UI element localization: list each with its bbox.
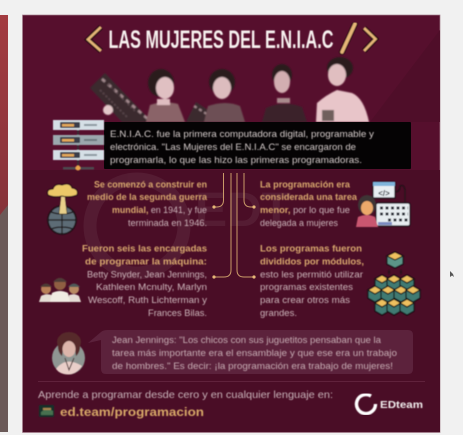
text: minor task: delegada a mujeres bbox=[260, 218, 338, 229]
text: modules: programas existentes bbox=[260, 282, 353, 293]
icon: left chevron bbox=[88, 27, 101, 51]
icon: three women bbox=[39, 278, 81, 302]
connector lines bbox=[212, 173, 256, 279]
watermark: EDteam logo: EDT bbox=[195, 184, 291, 237]
logo: EDteam bbox=[357, 395, 423, 414]
link: ed.team/programacion bbox=[60, 405, 204, 419]
text: construction: terminada en 1946. bbox=[128, 218, 207, 229]
text: six programmers: de programar la máquina: bbox=[85, 256, 207, 268]
call to action text: Aprende a programar desde cero y en cualquier lenguaje en: bbox=[38, 389, 333, 401]
logo: EDteam: EDteam bbox=[380, 399, 423, 411]
quote bubble: tarea más importante era el ensamblaje y que ese era un trabajo bbox=[112, 348, 397, 359]
text: six programmers: Fueron seis las encargadas bbox=[82, 244, 207, 254]
quote bubble: Jean Jennings: "Los chicos con sus juguetitos pensaban que la bbox=[112, 335, 382, 346]
intro text block bbox=[104, 122, 411, 169]
icon: modular cubes bbox=[368, 252, 420, 315]
text: modules: divididos por módulos, bbox=[260, 256, 364, 268]
photo: four programmers bbox=[90, 57, 369, 122]
icon: small landscape bbox=[39, 405, 54, 417]
heading text: LAS MUJERES DEL E.N.I.A.C bbox=[108, 26, 334, 54]
text: minor task: menor, por lo que fue bbox=[260, 205, 350, 216]
neighbouring panel: red edge bbox=[0, 15, 8, 432]
text: modules bbox=[260, 244, 364, 319]
circuit panel: middle bbox=[186, 102, 226, 122]
text: six programmers bbox=[82, 244, 207, 319]
quote bubble bbox=[88, 330, 413, 374]
intro text block: E.N.I.A.C. fue la primera computadora digital, programable y bbox=[110, 129, 374, 140]
arrow: top left bbox=[212, 173, 224, 209]
text: construction: mundial, en 1941, y fue bbox=[112, 205, 207, 216]
circuit panel: left bbox=[90, 73, 152, 122]
woman 3 bbox=[262, 64, 307, 122]
woman 1 bbox=[146, 69, 185, 122]
text: six programmers: Kathleen Mcnulty, Marlyn bbox=[96, 282, 207, 293]
arrow: top right bbox=[244, 173, 256, 209]
text: minor task: La programación era bbox=[260, 180, 351, 190]
cursor bbox=[450, 271, 454, 277]
text: construction bbox=[87, 180, 208, 229]
woman 4 bbox=[316, 57, 369, 122]
text: minor task: considerada una tarea bbox=[260, 192, 358, 203]
text: six programmers: Wescoff, Ruth Lichterman y bbox=[88, 295, 207, 306]
text: minor task bbox=[260, 180, 358, 229]
text: modules: esto les permitió utilizar bbox=[260, 270, 364, 280]
icon: server rack bbox=[53, 120, 104, 170]
icon: right chevron bbox=[364, 28, 376, 51]
icon: programmer with keyboard: </> bbox=[378, 189, 390, 198]
text: modules: Los programas fueron bbox=[260, 244, 362, 254]
icon: programmer with keyboard bbox=[356, 182, 410, 227]
icon: slash bbox=[342, 24, 355, 52]
text: six programmers: Frances Bilas. bbox=[148, 308, 207, 319]
watermark: EDteam logo bbox=[90, 179, 291, 273]
intro text block: programarla, lo que las hizo las primeras programadoras. bbox=[110, 155, 362, 166]
title bbox=[88, 24, 376, 54]
woman 2 bbox=[204, 69, 245, 122]
text: six programmers: Betty Snyder, Jean Jennings, bbox=[87, 270, 207, 280]
arrow: bottom left bbox=[212, 173, 231, 279]
text: modules: para crear otros más bbox=[260, 295, 350, 306]
text: construction: medio de la segunda guerra bbox=[87, 192, 208, 203]
text: construction: Se comenzó a construir en bbox=[94, 180, 207, 190]
quote bubble: de hombres." Es decir: ¡la programación era trabajo de mujeres! bbox=[112, 361, 393, 372]
portrait: Jean Jennings bbox=[52, 332, 85, 374]
icon: globe with explosion bbox=[48, 184, 77, 234]
arrow: bottom right bbox=[237, 173, 256, 279]
intro text block: electrónica. "Las Mujeres del E.N.I.A.C" se encargaron de bbox=[110, 142, 356, 153]
text: modules: grandes. bbox=[260, 308, 297, 319]
